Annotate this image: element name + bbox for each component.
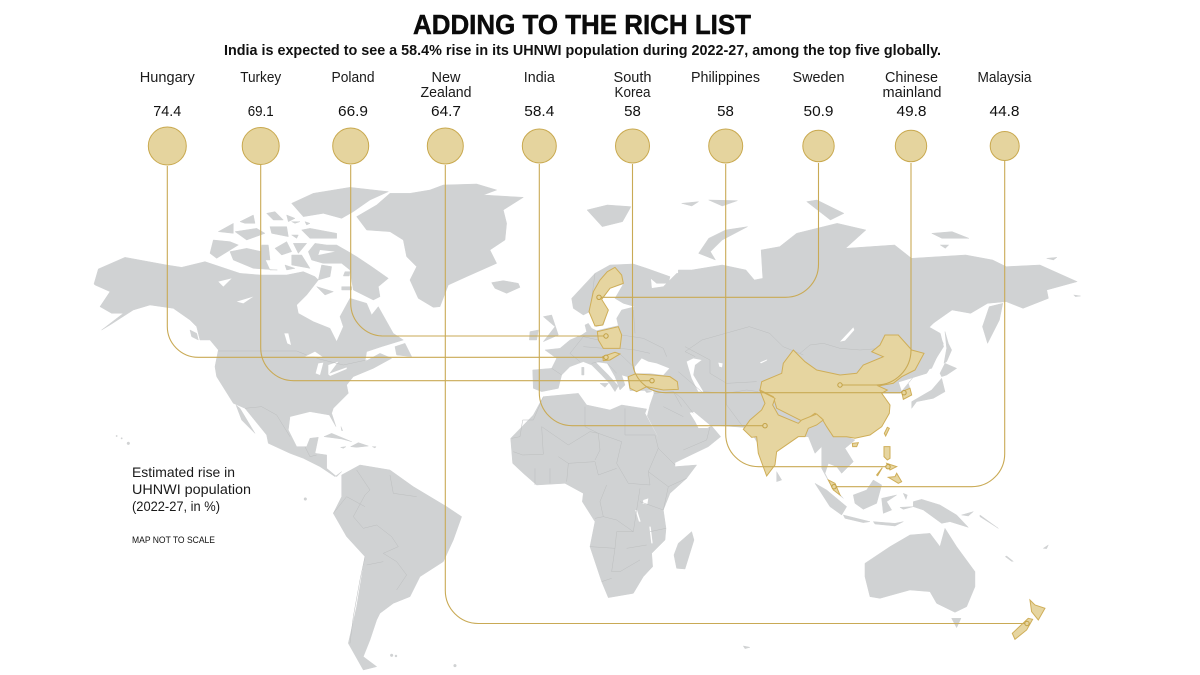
highlighted countries: south korea, philippines, malaysia, taiwan, hainan: [828, 388, 912, 495]
legend note: UHNWI population: [132, 481, 251, 497]
southeast asia islands, oceania and madagascar: [743, 472, 1048, 649]
percentage values: [153, 103, 1020, 120]
bubbles sized by percentage rise: [148, 127, 1019, 165]
country labels: Zealand: [420, 85, 472, 101]
endpoint dots: [597, 295, 1029, 626]
world map: [94, 184, 1081, 670]
country labels: South: [614, 70, 652, 86]
connector lines from bubbles to countries: [167, 160, 1027, 624]
country labels: New: [432, 70, 461, 86]
highlighted countries: sweden, poland, hungary, turkey: [589, 267, 678, 392]
country labels: [140, 70, 1032, 101]
line: south korea: [632, 164, 904, 393]
legend note: Estimated rise in: [132, 464, 235, 480]
country labels: Sweden: [792, 70, 844, 86]
line: india: [539, 164, 765, 426]
usa lakes, baja and caribbean: [236, 352, 376, 448]
africa: [511, 393, 697, 598]
country labels: Philippines: [691, 70, 760, 86]
country labels: Malaysia: [978, 70, 1032, 86]
percentage values: 58.4: [524, 103, 554, 120]
south america: [116, 435, 462, 670]
russia and northern asia: [587, 200, 1081, 403]
inland seas: [635, 327, 854, 392]
country labels: mainland: [882, 85, 942, 101]
highlighted country: chinese mainland: [760, 335, 924, 438]
country labels: Turkey: [240, 70, 282, 86]
canadian arctic islands: [210, 187, 388, 300]
line: hungary: [167, 166, 606, 357]
europe: [529, 264, 690, 393]
legend note: [132, 464, 251, 514]
country labels: Poland: [332, 70, 374, 86]
country labels: Chinese: [885, 70, 938, 86]
north america mainland and greenland: [94, 184, 523, 477]
percentage values: 49.8: [896, 103, 926, 120]
subtitle: India is expected to see a 58.4% rise in its UHNWI population during 2022-27, among the top five globally.: [224, 42, 941, 59]
line: turkey: [261, 165, 652, 381]
title: ADDING TO THE RICH LIST: [413, 9, 751, 40]
highlighted country: india: [743, 391, 823, 476]
line: poland: [351, 165, 606, 336]
country labels: Hungary: [140, 70, 196, 86]
percentage values: 44.8: [990, 103, 1020, 120]
percentage values: 50.9: [804, 103, 834, 120]
highlighted country: new zealand: [1012, 600, 1045, 639]
line: new zealand: [445, 165, 1027, 624]
line: malaysia: [834, 160, 1005, 487]
percentage values: 64.7: [431, 103, 461, 120]
percentage values: 69.1: [248, 103, 274, 120]
country labels: Korea: [614, 85, 651, 101]
map not to scale note: MAP NOT TO SCALE: [132, 535, 215, 545]
percentage values: 58: [717, 103, 734, 120]
east asia base, japan and indochina: [800, 320, 957, 498]
legend note: (2022-27, in %): [132, 498, 220, 514]
percentage values: 66.9: [338, 103, 368, 120]
line: sweden: [599, 163, 818, 297]
middle east and south asia base: [630, 340, 830, 463]
percentage values: 58: [624, 103, 641, 120]
percentage values: 74.4: [153, 103, 181, 120]
country borders: [167, 265, 882, 643]
line: chinese mainland: [840, 163, 911, 385]
line: philippines: [726, 164, 888, 467]
country labels: India: [524, 70, 556, 86]
